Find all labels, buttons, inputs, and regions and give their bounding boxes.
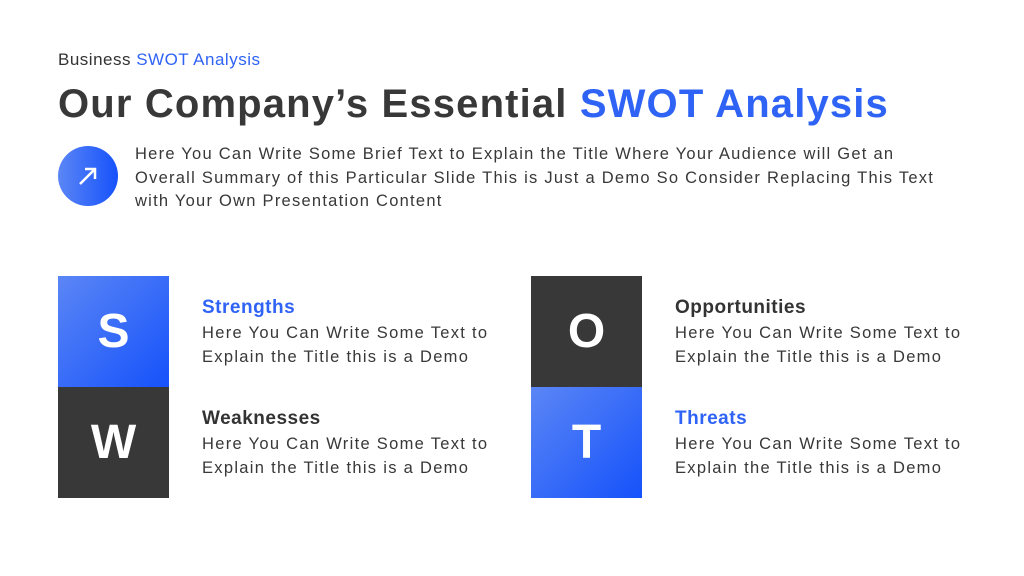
weaknesses text: Weaknesses [202,408,321,429]
weaknesses text: Here You Can Write Some Text to [202,435,488,453]
box S [58,276,169,387]
intro text: Here You Can Write Some Brief Text to Explain the Title Where Your Audience will Get an [135,145,894,163]
intro text [135,145,934,210]
threats text: Here You Can Write Some Text to [675,435,961,453]
opportunities text: Explain the Title this is a Demo [675,348,942,366]
opportunities text [675,297,961,366]
threats text [675,408,961,476]
strengths text: Strengths [202,297,295,318]
strengths text [202,297,488,366]
box O: O [568,305,605,358]
box T: T [572,416,601,469]
box O [531,276,642,387]
weaknesses text [202,408,488,476]
intro text: Overall Summary of this Particular Slide This is Just a Demo So Consider Replacing This Text [135,168,934,186]
opportunities text: Opportunities [675,297,806,318]
box W [58,387,169,498]
box W: W [91,416,136,469]
box S: S [97,305,130,358]
threats text: Explain the Title this is a Demo [675,458,942,476]
strengths text: Explain the Title this is a Demo [202,348,469,366]
opportunities text: Here You Can Write Some Text to [675,324,961,342]
title: Our Company’s Essential SWOT Analysis [58,82,889,126]
weaknesses text: Explain the Title this is a Demo [202,458,469,476]
intro text: with Your Own Presentation Content [135,192,443,210]
icon: arrow circle [58,146,118,206]
threats text: Threats [675,408,747,429]
box T [531,387,642,498]
subtitle: Business SWOT Analysis [58,50,260,69]
strengths text: Here You Can Write Some Text to [202,324,488,342]
